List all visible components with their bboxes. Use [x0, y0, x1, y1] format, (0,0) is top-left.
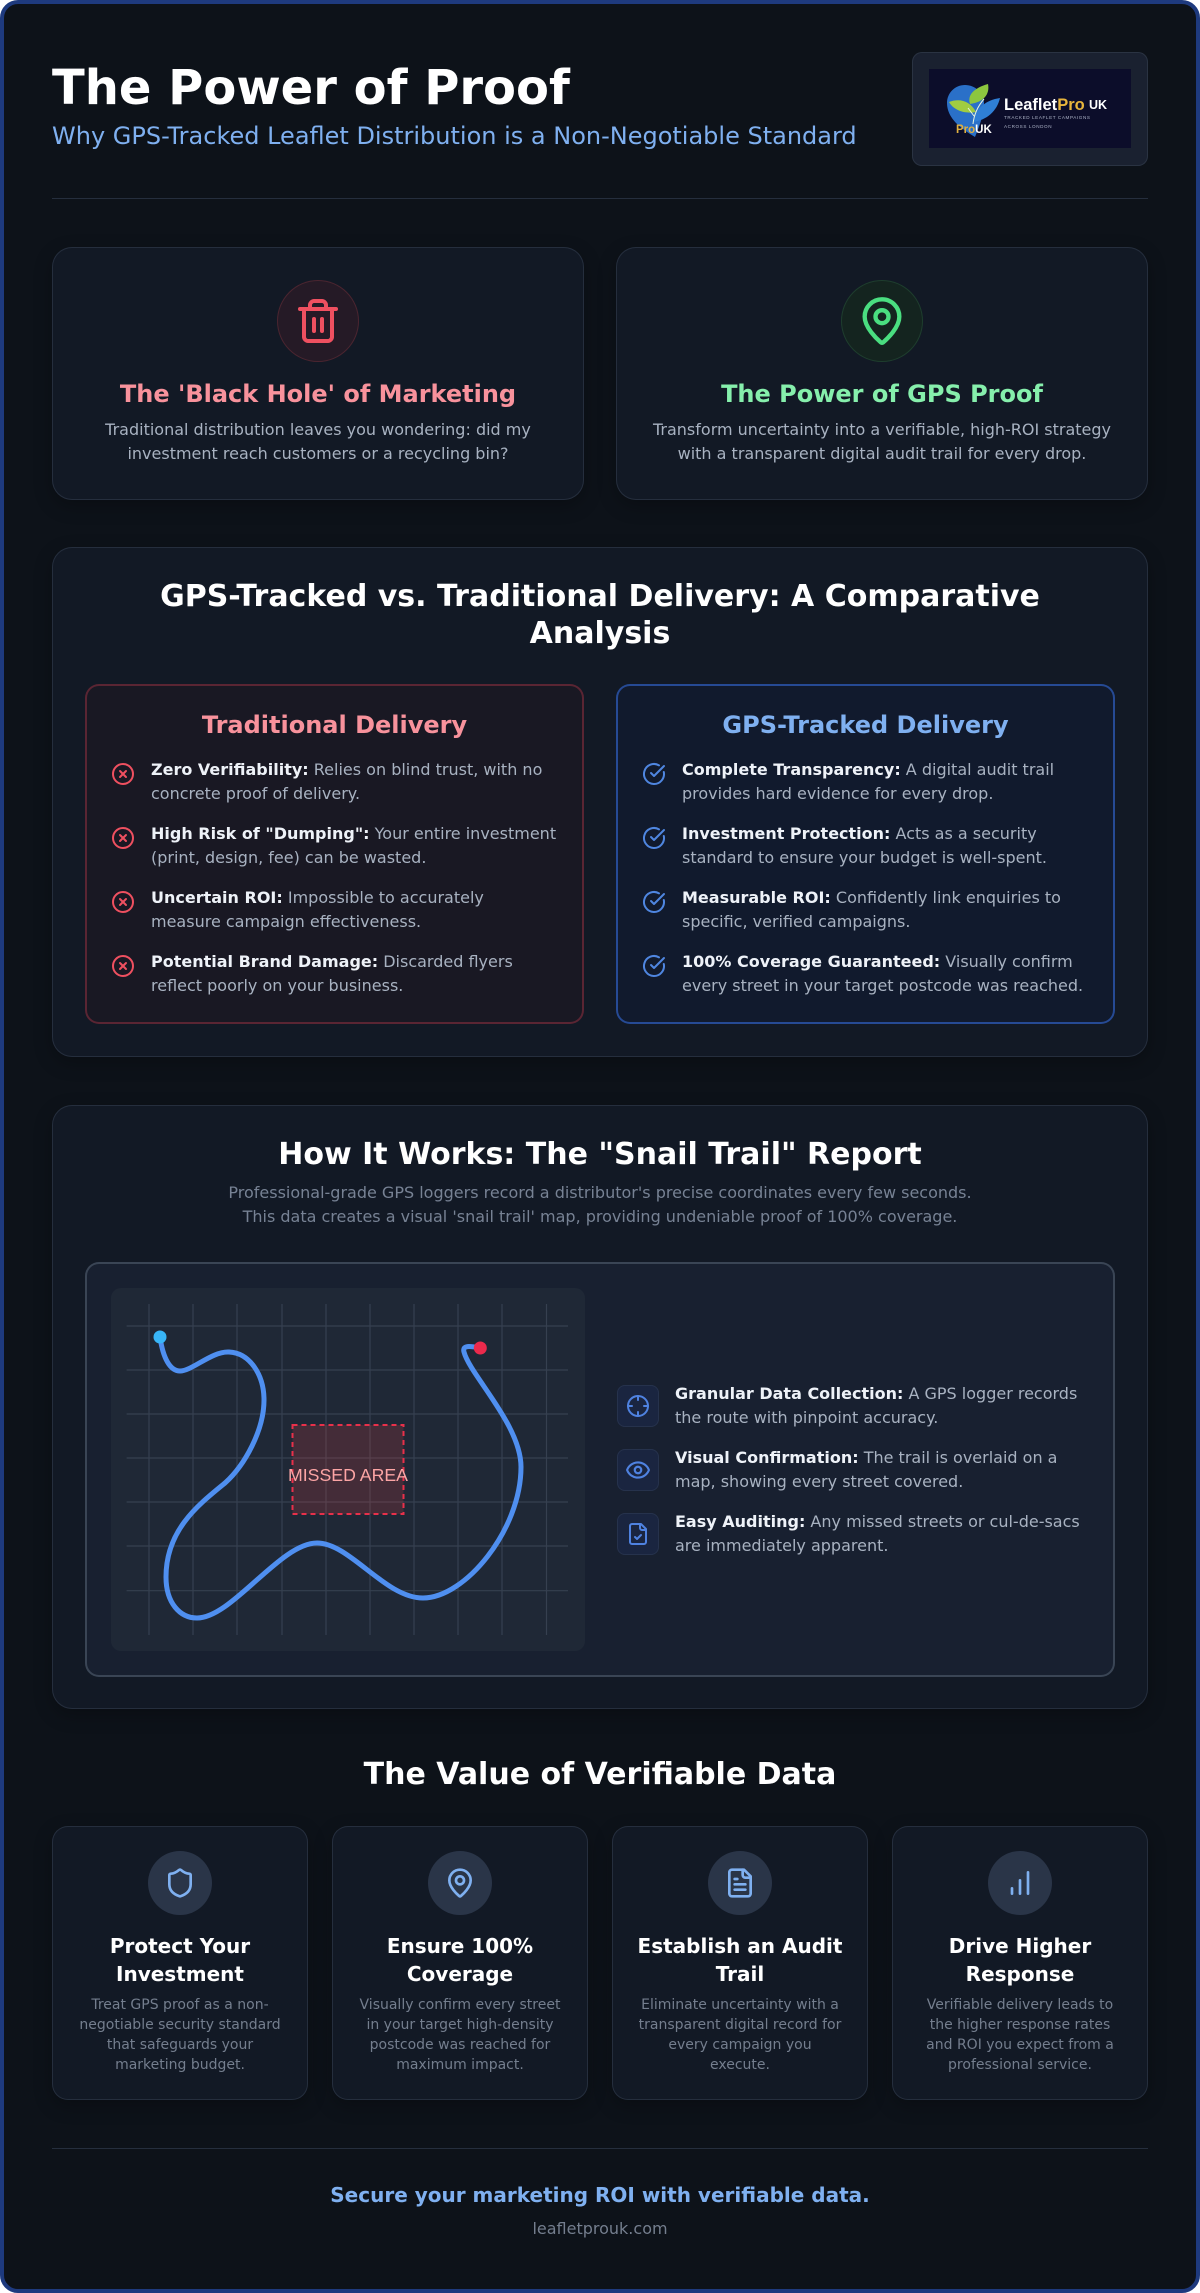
chart: snail trail map: [126, 1304, 568, 1635]
logo image: [929, 69, 1131, 148]
list item: specific, verified campaigns.: [682, 912, 910, 931]
text block: [228, 1183, 972, 1226]
text block: Treat GPS proof as a non-: [91, 1997, 269, 2013]
panel: power of GPS proof: [616, 247, 1148, 500]
text block: execute.: [710, 2057, 770, 2073]
heading: Ensure 100%: [387, 1934, 533, 1958]
list item: measure campaign effectiveness.: [151, 912, 421, 931]
icon: bar chart: [988, 1851, 1052, 1915]
text block: This data creates a visual 'snail trail' map, providing undeniable proof of 100% coverage.: [243, 1207, 957, 1226]
list item: concrete proof of delivery.: [151, 784, 360, 803]
logo image: LeafletPro: [1004, 96, 1085, 114]
text block: [105, 420, 531, 463]
heading: Trail: [716, 1962, 764, 1986]
list item: High Risk of "Dumping": Your entire investment: [151, 824, 556, 843]
icon: file check: [617, 1513, 659, 1555]
icon: eye: [617, 1449, 659, 1491]
icon: map pin: [428, 1851, 492, 1915]
list item: Visual Confirmation: The trail is overlaid on a: [675, 1448, 1057, 1467]
heading: Protect Your: [110, 1934, 250, 1958]
list item: Measurable ROI: Confidently link enquiries to: [682, 888, 1061, 907]
text block: Traditional distribution leaves you wondering: did my: [105, 420, 531, 439]
panel: protect your investment: [52, 1826, 308, 2100]
list item: Potential Brand Damage: Discarded flyers: [151, 952, 513, 971]
list item: map, showing every street covered.: [675, 1472, 963, 1491]
text block: the higher response rates: [930, 2017, 1110, 2033]
panel: black hole of marketing: [52, 247, 584, 500]
title: The Power of Proof: [52, 60, 570, 116]
list item: the route with pinpoint accuracy.: [675, 1408, 938, 1427]
icon: check: [642, 826, 665, 849]
heading: [949, 1934, 1092, 1986]
list item: reflect poorly on your business.: [151, 976, 403, 995]
icon: crosshair: [617, 1385, 659, 1427]
panel: GPS-tracked delivery: [616, 684, 1115, 1024]
list item: every street in your target postcode was reached.: [682, 976, 1083, 995]
icon: cross: [112, 827, 134, 849]
heading: [160, 579, 1040, 650]
heading: value of verifiable data: The Value of Verifiable Data: [364, 1757, 836, 1792]
panel: audit trail: [612, 1826, 868, 2100]
heading: [110, 1934, 250, 1986]
icon: shield: [148, 1851, 212, 1915]
heading: Investment: [116, 1962, 244, 1986]
icon: document: [708, 1851, 772, 1915]
text block: Transform uncertainty into a verifiable, high-ROI strategy: [653, 420, 1111, 439]
icon: trash: [277, 280, 359, 362]
list item: [151, 952, 513, 995]
logo image: TRACKED LEAFLET CAMPAIGNS: [1004, 115, 1091, 120]
icon: check: [642, 954, 665, 977]
list item: provides hard evidence for every drop.: [682, 784, 993, 803]
list item: [675, 1448, 1057, 1491]
footer url: leafletprouk.com: [532, 2219, 668, 2238]
text block: marketing budget.: [115, 2057, 245, 2073]
list item: [682, 888, 1061, 931]
heading: Coverage: [407, 1962, 513, 1986]
icon: cross: [112, 763, 134, 785]
text block: every campaign you: [668, 2037, 812, 2053]
heading: [387, 1934, 533, 1986]
heading: The 'Black Hole' of Marketing: [120, 380, 516, 408]
panel: traditional delivery: [85, 684, 584, 1024]
panel: higher response: [892, 1826, 1148, 2100]
footer tagline: Secure your marketing ROI with verifiable data.: [330, 2183, 870, 2207]
list item: [682, 952, 1083, 995]
text block: professional service.: [948, 2057, 1092, 2073]
chart: snail trail map: MISSED AREA: [288, 1465, 408, 1485]
list item: (print, design, fee) can be wasted.: [151, 848, 426, 867]
icon: check: [642, 890, 665, 913]
text block: negotiable security standard: [79, 2017, 281, 2033]
icon: check: [642, 762, 665, 785]
heading: Drive Higher: [949, 1934, 1091, 1958]
heading: Response: [966, 1962, 1074, 1986]
list item: [682, 824, 1047, 867]
list item: standard to ensure your budget is well-spent.: [682, 848, 1047, 867]
list item: [151, 888, 484, 931]
text block: postcode was reached for: [370, 2037, 550, 2053]
logo image: UK: [1089, 98, 1107, 112]
text block: transparent digital record for: [639, 2017, 841, 2033]
panel: how it works: [52, 1105, 1148, 1709]
icon: cross: [112, 891, 134, 913]
logo image: ProUK: [956, 124, 992, 136]
heading: The Power of GPS Proof: [721, 380, 1043, 408]
heading: GPS-Tracked Delivery: [722, 711, 1009, 739]
text block: in your target high-density: [366, 2017, 554, 2033]
list item: [682, 760, 1054, 803]
text block: maximum impact.: [396, 2057, 524, 2073]
panel: comparative analysis: [52, 547, 1148, 1057]
text block: Eliminate uncertainty with a: [641, 1997, 839, 2013]
text block: [79, 1997, 281, 2073]
text block: Visually confirm every street: [360, 1997, 560, 2013]
icon: map pin: [841, 280, 923, 362]
text block: investment reach customers or a recycling bin?: [127, 444, 509, 463]
list item: 100% Coverage Guaranteed: Visually confirm: [682, 952, 1073, 971]
heading: Traditional Delivery: [202, 711, 467, 739]
list item: [675, 1384, 1077, 1427]
text block: [639, 1997, 842, 2073]
logo card: [912, 52, 1148, 166]
list item: Easy Auditing: Any missed streets or cul-de-sacs: [675, 1512, 1080, 1531]
list item: Investment Protection: Acts as a security: [682, 824, 1037, 843]
logo image: ACROSS LONDON: [1004, 124, 1052, 129]
list item: [151, 760, 542, 803]
list item: [151, 824, 556, 867]
list item: Zero Verifiability: Relies on blind trust, with no: [151, 760, 542, 779]
list item: Uncertain ROI: Impossible to accurately: [151, 888, 484, 907]
icon: cross: [112, 955, 134, 977]
heading: How It Works: The "Snail Trail" Report: [278, 1137, 922, 1172]
list item: Granular Data Collection: A GPS logger records: [675, 1384, 1077, 1403]
text block: with a transparent digital audit trail for every drop.: [678, 444, 1086, 463]
panel: snail trail report: [85, 1262, 1115, 1677]
heading: [638, 1934, 842, 1986]
subtitle: Why GPS-Tracked Leaflet Distribution is a Non-Negotiable Standard: [52, 122, 857, 150]
heading: GPS-Tracked vs. Traditional Delivery: A Comparative: [160, 579, 1040, 614]
heading: Analysis: [530, 616, 670, 650]
list item: are immediately apparent.: [675, 1536, 888, 1555]
list item: [675, 1512, 1080, 1555]
text block: and ROI you expect from a: [926, 2037, 1114, 2053]
text block: [652, 420, 1111, 463]
text block: Professional-grade GPS loggers record a distributor's precise coordinates every few seconds.: [228, 1183, 972, 1202]
panel: ensure coverage: [332, 1826, 588, 2100]
heading: Establish an Audit: [638, 1934, 842, 1958]
text block: Verifiable delivery leads to: [927, 1997, 1113, 2013]
text block: [360, 1997, 560, 2073]
text block: [926, 1997, 1114, 2073]
text block: that safeguards your: [107, 2037, 253, 2053]
list item: Complete Transparency: A digital audit trail: [682, 760, 1054, 779]
